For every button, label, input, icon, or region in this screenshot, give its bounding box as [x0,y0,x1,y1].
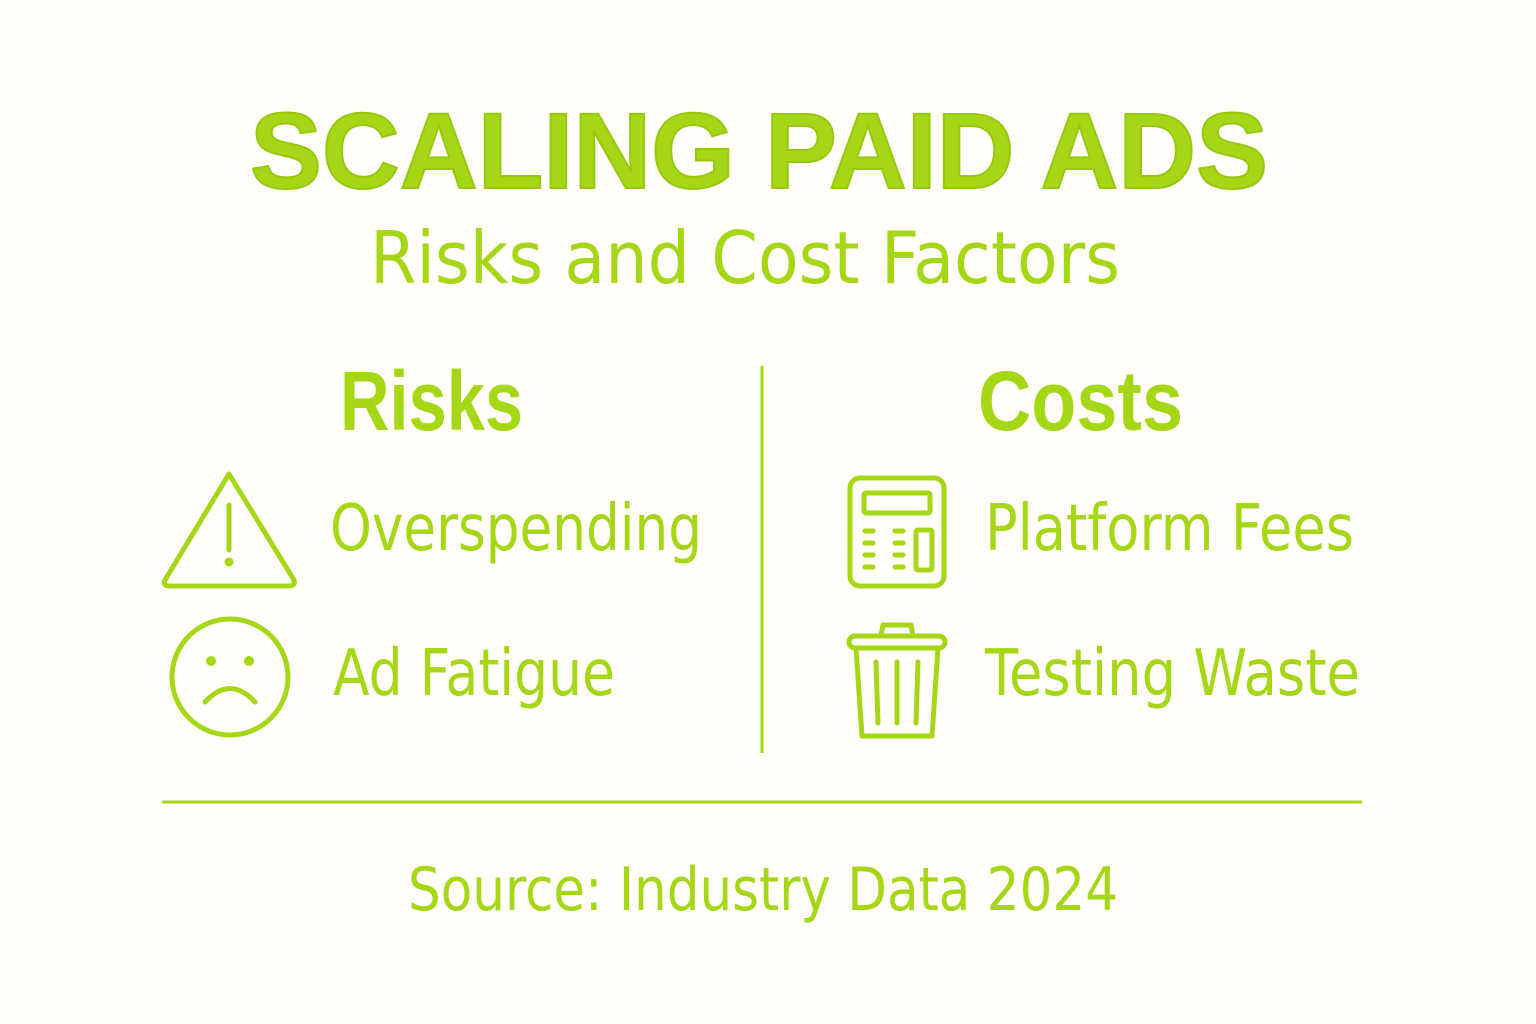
text: Overspending: Overspending [330,492,702,566]
heading: Costs: Costs [978,354,1183,448]
vertical divider [760,366,764,753]
text: Ad Fatigue: Ad Fatigue [333,637,615,711]
subtitle: Risks and Cost Factors [370,216,1120,300]
title: SCALING PAID ADS [250,90,1268,211]
icon: sad face [172,619,288,735]
icon: trash can [849,625,945,736]
heading: Risks: Risks [340,354,523,448]
source note: Source: Industry Data 2024 [408,855,1118,925]
icon: warning triangle [164,474,294,586]
text: Platform Fees: Platform Fees [985,492,1354,566]
text: Testing Waste: Testing Waste [984,637,1360,711]
icon: calculator [850,478,944,586]
horizontal divider [162,800,1362,804]
